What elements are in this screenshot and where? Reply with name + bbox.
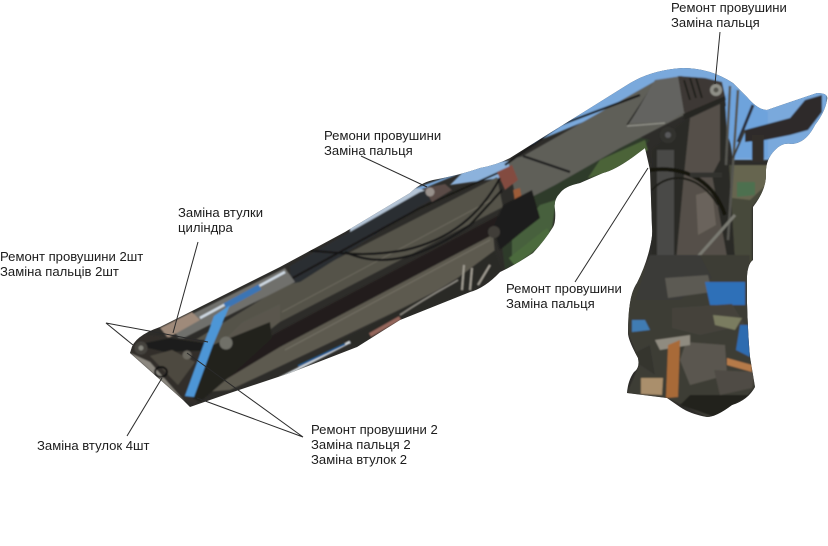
column [650,86,753,262]
label: head repair list [311,422,438,467]
label: cylinder bushing: циліндра [178,220,233,235]
label: boom head lugs repair: Ремонт провушини 2шт [0,249,143,264]
leader lines [106,32,720,437]
label: head repair list: Ремонт провушини 2 [311,422,438,437]
label: top pin repair: Ремонт провушини [671,0,787,15]
label: cylinder bushing [178,205,263,235]
label: top pin repair [671,0,787,30]
label: boom pin repair: Заміна пальця [324,143,413,158]
lower boom section [195,165,540,392]
hoses on boom [300,95,640,260]
label: boom head lugs repair: Заміна пальців 2шт [0,264,119,279]
cylinder rod and upper head [160,268,296,340]
cut-out photo of crane boom [120,60,828,420]
label: boom pin repair: Ремони провушини [324,128,441,143]
seat at top right [733,95,822,162]
label: boom head lugs repair [0,249,144,279]
label: column pin repair [506,281,622,311]
label: column pin repair: Ремонт провушини [506,281,622,296]
boom head with pins [130,305,272,405]
foliage behind boom [500,135,768,270]
label: boom pin repair [324,128,441,158]
base machinery [627,255,755,417]
label: head repair list: Заміна пальця 2 [311,437,411,452]
label: cylinder bushing: Заміна втулки [178,205,263,220]
label: bushings replacement: Заміна втулок 4шт [37,438,150,453]
scenery under boom with hoses [280,232,550,378]
sky background [350,66,827,232]
label: top pin repair: Заміна пальця [671,15,760,30]
upper boom section [508,76,726,202]
illustration: crane boom cut-out photo with leader lines [106,32,828,438]
label: column pin repair: Заміна пальця [506,296,595,311]
label: head repair list: Заміна втулок 2 [311,452,407,467]
